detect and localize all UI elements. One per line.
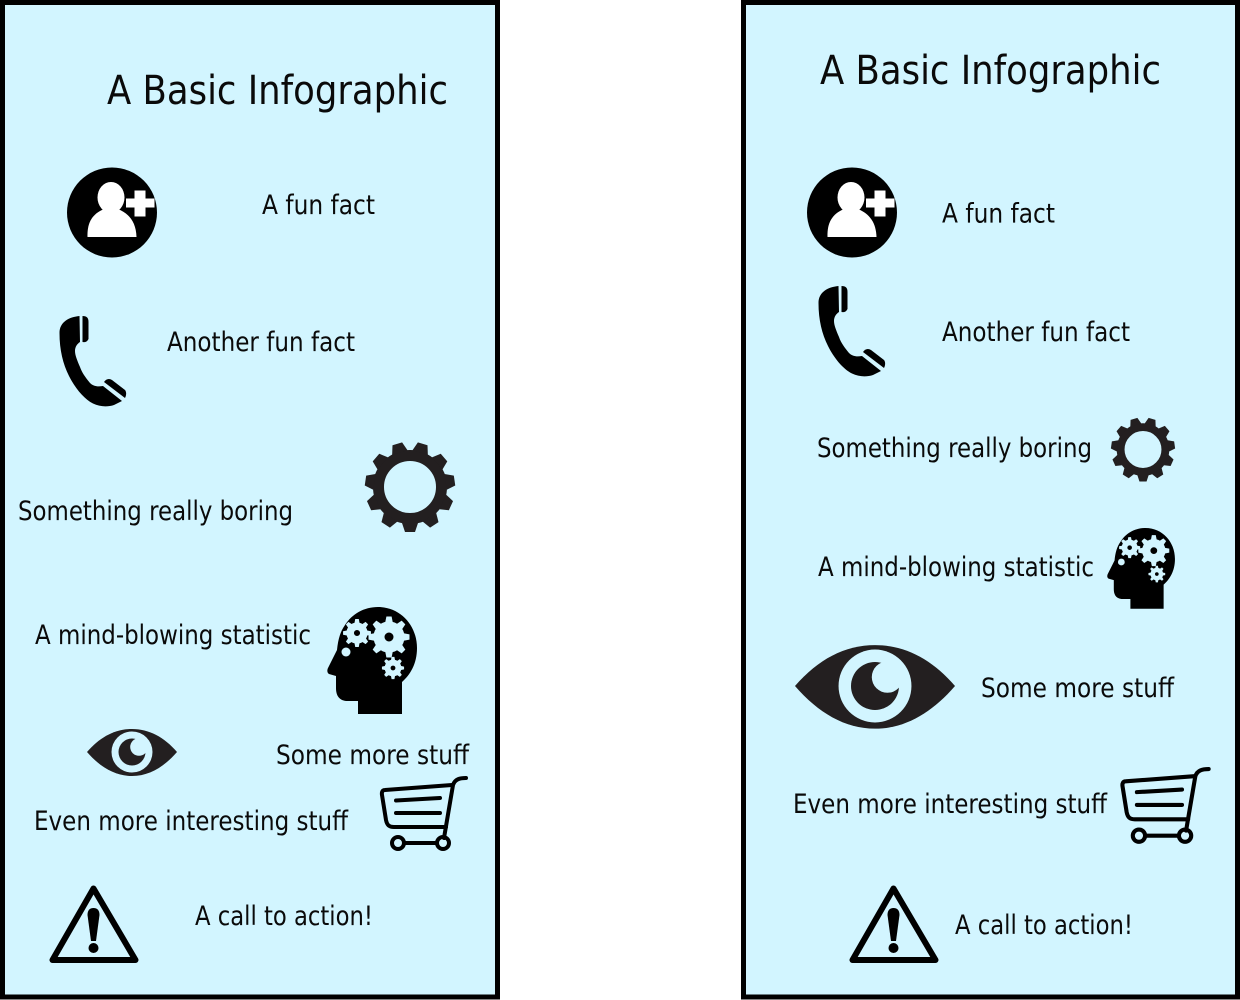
icon: shopping cart <box>382 778 466 849</box>
text: a call to action: A call to action! <box>955 910 1133 941</box>
text: something really boring: Something really boring <box>817 433 1092 464</box>
text: a call to action: A call to action! <box>195 901 373 932</box>
icon: telephone <box>818 286 885 376</box>
icon: warning triangle <box>52 888 136 960</box>
text: some more stuff: Some more stuff <box>981 673 1175 704</box>
text: another fun fact: Another fun fact <box>942 317 1130 348</box>
icon: person with plus <box>807 168 897 258</box>
text: a mind-blowing statistic: A mind-blowing statistic <box>35 620 311 651</box>
icon: eye <box>795 645 955 729</box>
icon: warning triangle <box>852 888 936 960</box>
icon: eye <box>87 729 177 776</box>
icon: telephone <box>60 316 126 406</box>
text: even more interesting stuff: Even more interesting stuff <box>34 806 349 837</box>
icon: head with gears <box>1107 528 1175 609</box>
icon: head with gears <box>327 607 417 714</box>
text: a mind-blowing statistic: A mind-blowing statistic <box>818 552 1094 583</box>
icon: gear <box>364 442 456 532</box>
text: something really boring: Something really boring <box>18 496 293 527</box>
panel: left version <box>2 2 498 997</box>
text: some more stuff: Some more stuff <box>276 740 470 771</box>
title: A Basic Infographic <box>107 68 448 114</box>
title: A Basic Infographic <box>820 48 1161 94</box>
icon: gear <box>1111 417 1175 481</box>
text: another fun fact: Another fun fact <box>167 327 355 358</box>
text: a fun fact: A fun fact <box>942 198 1055 230</box>
icon: person with plus <box>67 168 157 258</box>
text: a fun fact: A fun fact <box>262 190 375 221</box>
panel: right version <box>744 2 1238 997</box>
icon: shopping cart <box>1122 769 1209 842</box>
text: even more interesting stuff: Even more interesting stuff <box>793 789 1108 820</box>
